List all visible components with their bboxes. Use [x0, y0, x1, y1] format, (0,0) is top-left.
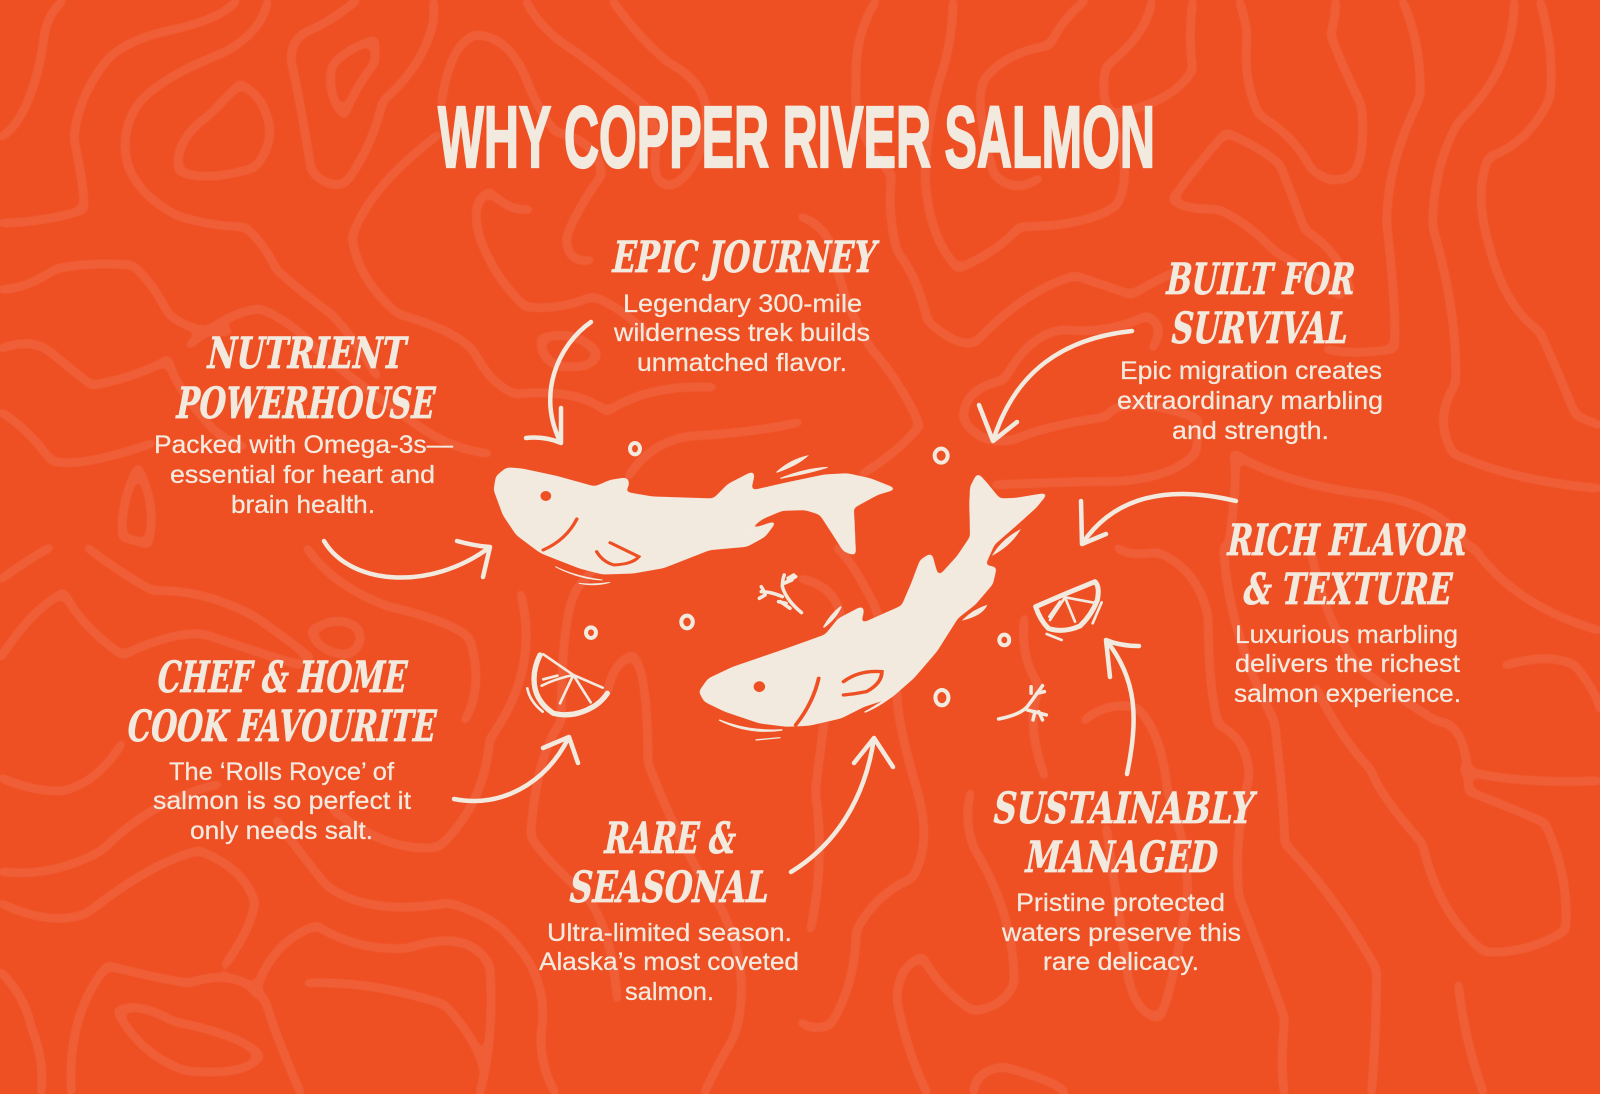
- text: nutrient powerhouse description: essential for heart and: [170, 461, 435, 489]
- heading: epic journey: EPIC JOURNEY: [608, 232, 881, 283]
- heading: sustainably managed: SUSTAINABLY: [989, 783, 1259, 834]
- text: epic journey description: Legendary 300-mile: [623, 290, 862, 318]
- heading: rich flavor and texture: [1223, 515, 1472, 615]
- arrow: epic journey to salmon: [526, 322, 591, 443]
- heading: rare and seasonal: [565, 813, 774, 913]
- heading: chef and home cook favourite: COOK FAVOURITE: [123, 701, 441, 752]
- text: built for survival description: and strength.: [1172, 417, 1329, 445]
- icon: right lemon wedge: [1036, 582, 1102, 640]
- panel: sustainably managed: [989, 783, 1259, 976]
- text: chef favourite description: only needs salt.: [190, 817, 373, 845]
- text: rich flavor description: salmon experience.: [1234, 680, 1461, 708]
- text: rich flavor description: [1234, 621, 1461, 708]
- text: built for survival description: [1117, 357, 1383, 445]
- heading: built for survival: [1162, 254, 1360, 354]
- text: rich flavor description: Luxurious marbling: [1235, 621, 1458, 649]
- text: rare and seasonal description: salmon.: [625, 978, 714, 1006]
- heading: nutrient powerhouse: NUTRIENT: [203, 328, 411, 379]
- heading: nutrient powerhouse: POWERHOUSE: [172, 378, 440, 429]
- text: built for survival description: extraordinary marbling: [1117, 387, 1383, 415]
- text: chef favourite description: salmon is so perfect it: [153, 787, 411, 815]
- text: epic journey description: [613, 290, 870, 377]
- panel: rare and seasonal: [539, 813, 799, 1006]
- panel: epic journey: [608, 232, 881, 377]
- text: sustainably managed description: [1001, 889, 1241, 976]
- heading: rare and seasonal: RARE &: [600, 813, 741, 864]
- text: nutrient powerhouse description: brain health.: [231, 491, 375, 519]
- heading: sustainably managed: [989, 783, 1259, 883]
- arrow: rare and seasonal to salmon: [791, 738, 893, 872]
- text: sustainably managed description: waters preserve this: [1001, 919, 1241, 947]
- heading: rare and seasonal: SEASONAL: [565, 862, 774, 913]
- arrow: sustainably managed to lemon: [1106, 640, 1139, 774]
- text: epic journey description: unmatched flavor.: [637, 349, 847, 377]
- icon: upper salmon: [494, 456, 897, 585]
- icon: bubbles: [586, 443, 1009, 705]
- panel: built for survival: [1117, 254, 1383, 445]
- panel: rich flavor and texture: [1223, 515, 1472, 708]
- heading: built for survival: BUILT FOR: [1162, 254, 1360, 305]
- text: rare and seasonal description: Ultra-limited season.: [547, 919, 792, 947]
- icon: lower salmon: [699, 473, 1048, 740]
- text: built for survival description: Epic migration creates: [1120, 357, 1382, 385]
- text: nutrient powerhouse description: [154, 431, 453, 519]
- text: chef favourite description: [153, 758, 411, 845]
- text: rare and seasonal description: Alaska’s most coveted: [539, 948, 799, 976]
- icon: left lemon wedge: [527, 654, 607, 715]
- text: nutrient powerhouse description: Packed with Omega-3s—: [154, 431, 453, 459]
- text: chef favourite description: The ‘Rolls Royce’ of: [169, 758, 394, 786]
- arrow: built for survival to salmon: [979, 331, 1132, 441]
- heading: chef and home cook favourite: [123, 652, 441, 752]
- heading: nutrient powerhouse: [172, 328, 440, 429]
- arrow: rich flavor to salmon: [1081, 494, 1236, 544]
- text: rare and seasonal description: [539, 919, 799, 1006]
- heading: rich flavor and texture: & TEXTURE: [1239, 564, 1457, 615]
- icon: center herb sprig: [759, 575, 801, 613]
- panel: nutrient powerhouse: [154, 328, 453, 519]
- heading: sustainably managed: MANAGED: [1021, 832, 1223, 883]
- arrow: nutrient powerhouse to salmon: [324, 541, 490, 578]
- text: rich flavor description: delivers the richest: [1235, 650, 1460, 678]
- heading: chef and home cook favourite: CHEF & HOME: [153, 652, 412, 703]
- text: sustainably managed description: Pristine protected: [1016, 889, 1225, 917]
- icon: right herb sprig: [999, 686, 1046, 720]
- text: epic journey description: wilderness trek builds: [613, 319, 870, 347]
- heading: rich flavor and texture: RICH FLAVOR: [1223, 515, 1472, 566]
- panel: chef and home cook favourite: [123, 652, 441, 845]
- text: sustainably managed description: rare delicacy.: [1043, 948, 1199, 976]
- arrow: chef favourite to lemon: [454, 737, 578, 801]
- heading: built for survival: SURVIVAL: [1167, 303, 1353, 354]
